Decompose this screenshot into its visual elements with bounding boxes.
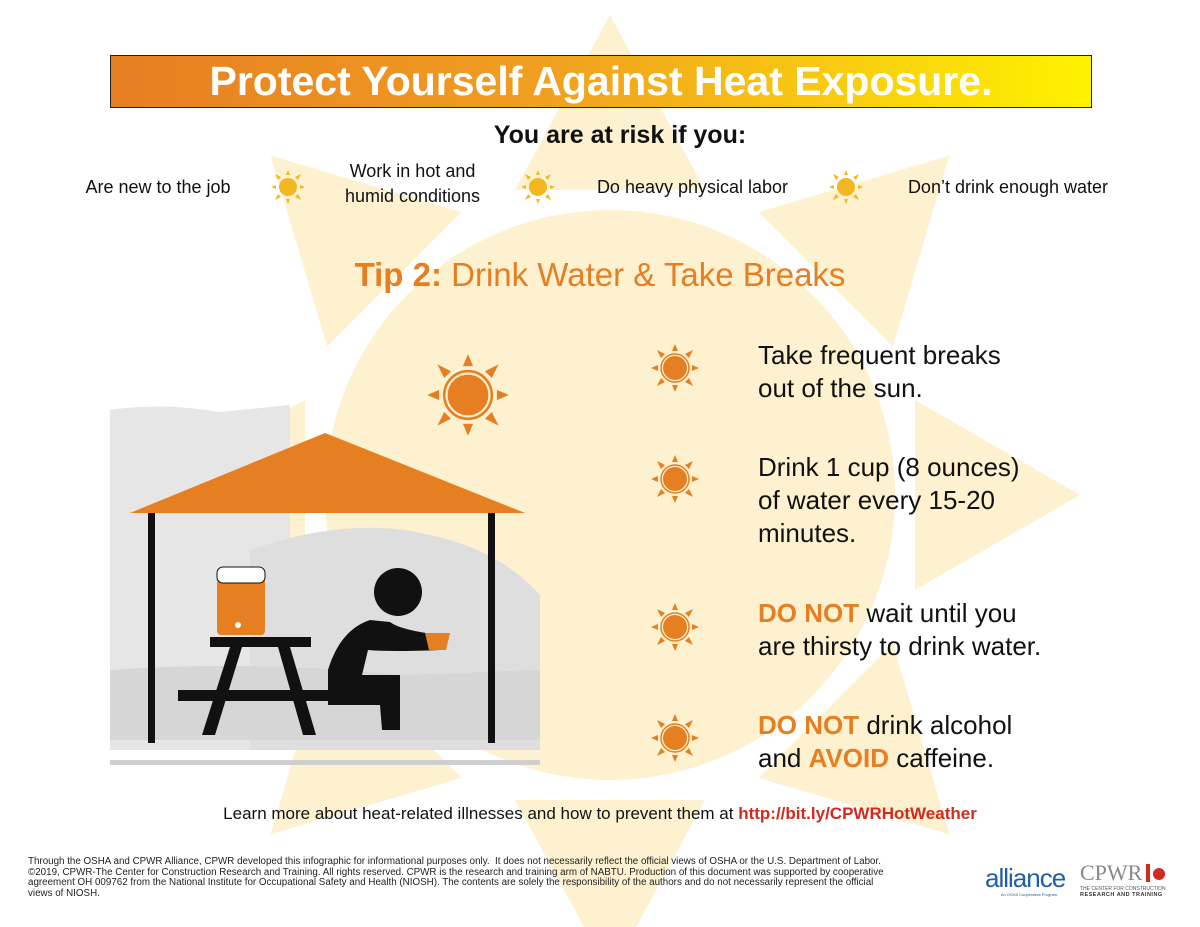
risk: water: Don’t drink enough water <box>908 177 1108 197</box>
risk: heavy labor: Do heavy physical labor <box>597 177 788 197</box>
illustration: shade shelter <box>110 405 540 765</box>
tip 4: and AVOID caffeine. <box>758 743 994 773</box>
logo: alliance: alliance <box>985 863 1065 893</box>
icon: sun 3 <box>829 170 863 204</box>
tip 2 <box>758 452 1020 548</box>
icon: tip sun 2 <box>651 455 699 503</box>
logo: CPWR: THE CENTER FOR CONSTRUCTION <box>1080 886 1166 892</box>
table <box>210 637 311 647</box>
tip 1 <box>758 340 1001 403</box>
learn more line: Learn more about heat-related illnesses and how to prevent them at http://bit.ly/CPWRHotWeather <box>223 804 977 823</box>
icon: tip sun 4 <box>651 714 699 762</box>
logo: alliance: An OSHA Cooperative Program <box>1001 892 1057 897</box>
tip 1: Take frequent breaks <box>758 340 1001 370</box>
tip 3 <box>758 598 1041 661</box>
tip 2: of water every 15-20 <box>758 485 995 515</box>
icon: sun 2 <box>521 170 555 204</box>
tip 4: DO NOT drink alcohol <box>758 710 1012 740</box>
title banner: Protect Yourself Against Heat Exposure. <box>209 58 992 104</box>
title banner <box>110 55 1092 108</box>
tip 3: are thirsty to drink water. <box>758 631 1041 661</box>
logo: CPWR <box>1080 860 1166 898</box>
icon: tip sun 1 <box>651 344 699 392</box>
logo: CPWR: CPWR <box>1080 860 1142 885</box>
footer disclaimer: ©2019, CPWR-The Center for Construction Research and Training. All rights reserved. CPWR is the research and training arm of NABTU. Production of this document was supported by cooperative agreement OH 009762 from the National Institute for Occupational Safety and Health (NIOSH). The contents are solely the responsibility of the authors and do not necessarily represent the official views of NIOSH. <box>28 866 884 898</box>
subtitle: You are at risk if you: <box>494 121 746 149</box>
tip 2: minutes. <box>758 518 856 548</box>
risk: new to job: Are new to the job <box>85 177 231 197</box>
icon: tip sun 3 <box>651 603 699 651</box>
icon: sun 1 <box>271 170 305 204</box>
tip 3: DO NOT wait until you <box>758 598 1017 628</box>
risk list <box>85 161 1108 206</box>
icon: shelter sun <box>427 354 509 436</box>
tip 2: Drink 1 cup (8 ounces) <box>758 452 1020 482</box>
footer disclaimer: Through the OSHA and CPWR Alliance, CPWR developed this infographic for informational purposes only. It does not necessarily reflect the official views of OSHA or the U.S. Department of Labor. <box>28 856 881 867</box>
tips list <box>651 344 699 762</box>
tip heading: Tip 2: Drink Water & Take Breaks <box>355 256 845 293</box>
roof <box>130 433 525 513</box>
risk: hot humid: Work in hot and humid conditions <box>345 161 480 206</box>
logo: CPWR: RESEARCH AND TRAINING <box>1080 892 1163 898</box>
person <box>374 568 422 616</box>
tip 4 <box>758 710 1012 773</box>
cooler <box>217 570 265 635</box>
tip 1: out of the sun. <box>758 373 923 403</box>
